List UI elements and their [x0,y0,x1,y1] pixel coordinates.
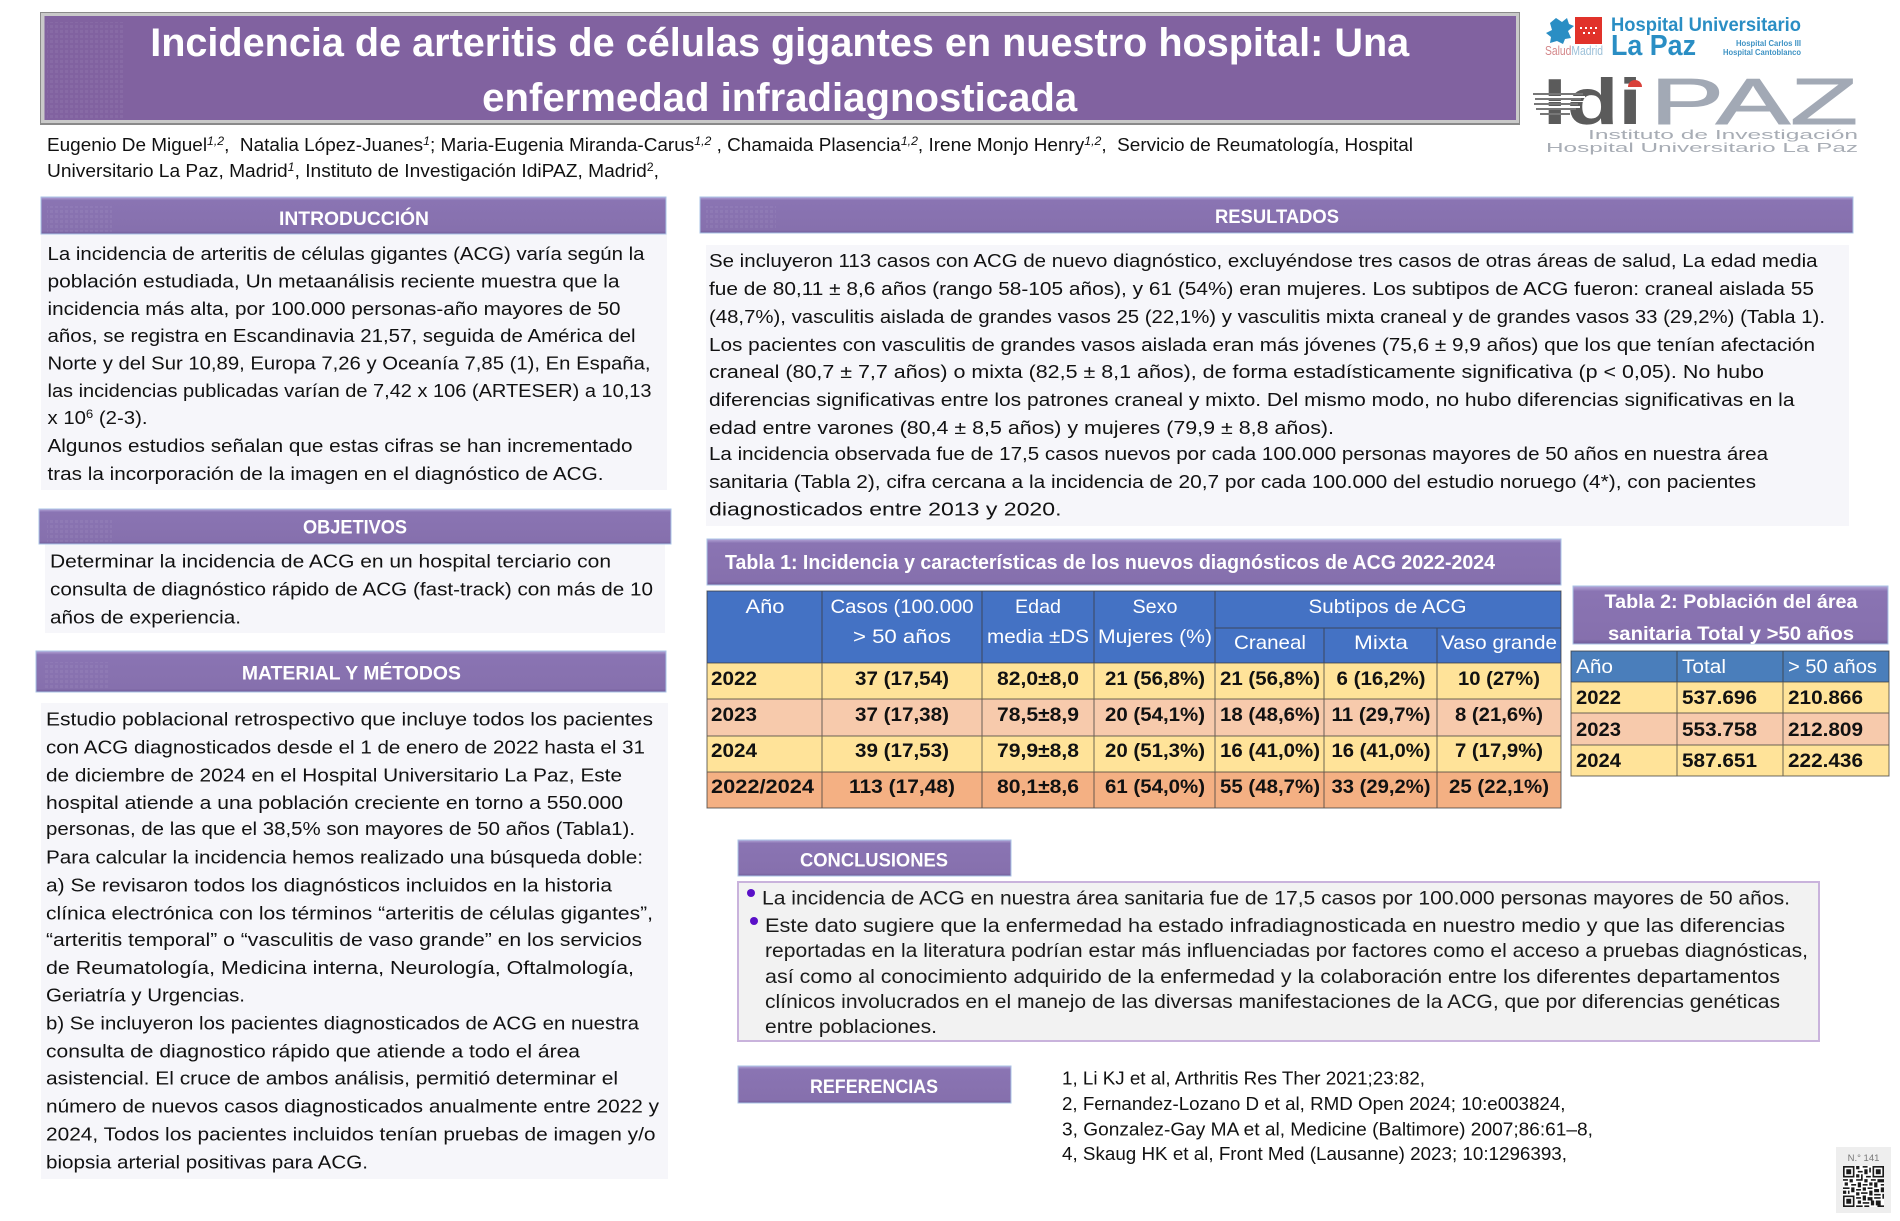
text block: material y métodos: Geriatría y Urgencias. [46,984,245,1006]
text block: introducción: Norte y del Sur 10,89, Europa 7,26 y Oceanía 7,85 (1), En España, [48,352,650,374]
text block: introducción: años, se registra en Escandinavia 21,57, seguida de América del [48,325,636,346]
table 1: 2022/2024 [711,776,814,798]
text block: introducción: población estudiada, Un metaanálisis reciente muestra que la [48,270,620,292]
table 1: 2024 [711,740,757,762]
heading: tabla 1 [707,539,1561,585]
text block: material y métodos [46,708,660,1172]
heading: resultados [700,197,1853,233]
logo: IdiPAZ [1533,65,1858,155]
text block: resultados: La incidencia observada fue de 17,5 casos nuevos por cada 100.000 personas mayores de 50 años en nuestra área [709,443,1769,464]
panel: resultados [700,197,1853,526]
authors and affiliations: Eugenio De Miguel [47,134,203,155]
table 2 [1571,651,1889,776]
logo: IdiPAZ: PAZ [1650,65,1858,138]
authors and affiliations [47,134,1413,181]
table 1: Mujeres (%) [1098,626,1212,648]
text block: introducción [48,243,652,484]
poster number and QR code [1836,1147,1891,1213]
logo: Hospital Universitario La Paz: La Paz [1611,30,1696,62]
conclusion 2: clínicos involucrados en el manejo de las diversas manifestaciones de la ACG, que por diferencias genéticas [765,991,1780,1013]
authors and affiliations: , Instituto de Investigación IdiPAZ, Madrid [295,160,647,181]
text block: material y métodos: biopsia arterial positivas para ACG. [46,1152,368,1172]
references list: 1, Li KJ et al, Arthritis Res Ther 2021;23:82, [1062,1068,1425,1088]
table 1: 18 (48,6%) [1220,704,1320,726]
conclusion 2 [765,915,1808,1038]
table 1: 2023 [711,704,757,726]
logo: Hospital Universitario La Paz: SaludMadrid [1545,44,1603,58]
conclusion 1: La incidencia de ACG en nuestra área sanitaria fue de 17,5 casos por 100.000 personas mayores de 50 años. [762,888,1790,910]
text block: material y métodos: 2024, Todos los pacientes incluidos tenían pruebas de imagen y/o [46,1124,656,1144]
text block: material y métodos: personas, de las que el 38,5% son mayores de 50 años (Tabla1). [46,818,635,839]
references list: 3, Gonzalez-Gay MA et al, Medicine (Baltimore) 2007;86:61–8, [1062,1118,1593,1140]
text block: objetivos: Determinar la incidencia de ACG en un hospital terciario con [50,550,611,572]
text block: objetivos [50,550,653,628]
text block: introducción: las incidencias publicadas varían de 7,42 x 106 (ARTESER) a 10,13 [48,380,652,401]
table 1: Año [746,596,785,618]
table 2: 553.758 [1682,720,1757,741]
bullet 2 [750,917,758,925]
table 1: 37 (17,38) [855,704,949,726]
text block: resultados: diagnosticados entre 2013 y 2020. [709,498,1062,520]
table 1: 37 (17,54) [855,668,949,690]
logo: Hospital Universitario La Paz: Hospital Universitario [1611,14,1801,36]
text block: material y métodos: consulta de diagnostico rápido que atiende a todo el área [46,1040,581,1062]
table 1: 20 (54,1%) [1105,704,1205,726]
text block: material y métodos: clínica electrónica con los términos “arteritis de células gigantes”, [46,902,653,924]
text block: resultados: fue de 80,11 ± 8,6 años (rango 58-105 años), y 61 (54%) eran mujeres. Los subtipos de ACG fueron: craneal aislada 55 [709,278,1814,299]
table 1: > 50 años [853,626,951,648]
table 1: 11 (29,7%) [1332,704,1430,726]
text block: material y métodos: a) Se revisaron todos los diagnósticos incluidos en la historia [46,874,613,896]
table 1: 21 (56,8%) [1105,668,1205,690]
text block: material y métodos: de diciembre de 2024 en el Hospital Universitario La Paz, Este [46,764,622,786]
text block: material y métodos: número de nuevos casos diagnosticados anualmente entre 2022 y [46,1096,660,1116]
text block: material y métodos: Estudio poblacional retrospectivo que incluye todos los pacientes [46,708,653,730]
heading: material y métodos [36,651,666,692]
table 1: 20 (51,3%) [1105,740,1205,762]
title banner: Incidencia de arteritis de células gigantes en nuestro hospital: Una [150,21,1410,65]
text block: material y métodos: de Reumatología, Medicina interna, Neurología, Oftalmología, [46,957,634,978]
authors and affiliations: 1 [423,134,430,148]
authors and affiliations: , Natalia López-Juanes [224,134,423,155]
table 1: 78,5±8,9 [997,704,1079,726]
text block: resultados: Los pacientes con vasculitis de grandes vasos aislada eran más jóvenes (75,6 ± 9,9 años) que los que tenían afectación [709,334,1815,355]
panel: introducción [41,197,667,490]
table 1: 8 (21,6%) [1455,704,1543,726]
table 1: Mixta [1354,632,1408,654]
heading: objetivos [39,509,671,544]
text block: resultados: edad entre varones (80,4 ± 8,5 años) y mujeres (79,9 ± 8,8 años). [709,417,1334,438]
authors and affiliations: ; Maria-Eugenia Miranda-Carus [430,134,694,155]
table 2: 210.866 [1788,688,1863,709]
table 1: 6 (16,2%) [1336,668,1426,690]
authors and affiliations: 1,2 [694,134,712,148]
table 1: Sexo [1132,596,1178,618]
table 2: 222.436 [1788,751,1863,772]
text block: introducción: x 10 [48,407,82,428]
panel: material y métodos [36,651,668,1179]
authors and affiliations: 2 [647,160,654,174]
heading: conclusiones: CONCLUSIONES [800,850,948,872]
table 2: 2022 [1576,688,1621,709]
table 1: 39 (17,53) [855,740,949,762]
table 2: 2023 [1576,720,1621,741]
table 2: > 50 años [1788,657,1877,678]
text block: material y métodos: b) Se incluyeron los pacientes diagnosticados de ACG en nuestra [46,1012,640,1034]
table 1: 21 (56,8%) [1220,668,1320,690]
text block: introducción: La incidencia de arteritis de células gigantes (ACG) varía según la [48,243,645,264]
logo: IdiPAZ: Hospital Universitario La Paz [1546,140,1858,155]
table 1: 79,9±8,8 [997,740,1079,762]
heading: referencias [738,1066,1011,1103]
bullet 1 [747,889,755,897]
conclusion 2: reportadas en la literatura podrían estar más influenciadas por factores como el acceso a pruebas diagnósticas, [765,940,1808,962]
table 1: 2022 [711,668,757,690]
logo: IdiPAZ: Idi [1543,65,1642,138]
table 2: 2024 [1576,751,1621,772]
authors and affiliations: Universitario La Paz, Madrid [47,160,279,181]
table 1: Casos (100.000 [830,596,974,618]
table 1: 25 (22,1%) [1449,776,1549,798]
authors and affiliations: , Irene Monjo Henry [918,134,1085,155]
table 2: 212.809 [1788,720,1863,741]
conclusion 2: así como al conocimiento adquirido de la enfermedad y la colaboración entre los diferentes departamentos [765,966,1780,988]
text block: resultados [709,250,1825,520]
table 1: 7 (17,9%) [1455,740,1543,762]
table 1: media ±DS [987,626,1089,648]
authors and affiliations: 1,2 [207,134,224,148]
authors and affiliations: , Servicio de Reumatología, Hospital [1101,134,1413,155]
table 1: Vaso grande [1441,632,1557,654]
table 1: Subtipos de ACG [1308,596,1466,618]
logo: IdiPAZ: Instituto de Investigación [1588,127,1858,142]
text block: objetivos: años de experiencia. [50,606,241,628]
text block: resultados: (48,7%), vasculitis aislada de grandes vasos 25 (22,1%) y vasculitis mixta craneal y de grandes vasos 33 (29,2%) (Tabla 1). [709,306,1825,327]
table 1: 82,0±8,0 [997,668,1079,690]
title banner: enfermedad infradiagnosticada [482,76,1078,120]
logo: Hospital Universitario La Paz: Hospital Cantoblanco [1723,48,1801,57]
conclusion 2: entre poblaciones. [765,1016,937,1038]
title banner [40,12,1520,125]
authors and affiliations: , Chamaida Plasencia [711,134,902,155]
table 2: Año [1576,657,1613,678]
text block: resultados: craneal (80,7 ± 7,7 años) o mixta (82,5 ± 8,1 años), de forma estadísticamente significativa (p < 0,05). No hubo [709,361,1764,382]
text block: introducción: tras la incorporación de la imagen en el diagnóstico de ACG. [48,463,604,484]
text block: material y métodos: Para calcular la incidencia hemos realizado una búsqueda doble: [46,846,643,868]
authors and affiliations: , [654,160,659,181]
heading: tabla 2: Tabla 2: Población del área [1604,592,1858,613]
table 2: 587.651 [1682,751,1757,772]
table 1: 55 (48,7%) [1220,776,1320,798]
table 1 [707,591,1561,808]
table 1: 113 (17,48) [849,776,955,798]
heading: referencias: REFERENCIAS [810,1077,938,1098]
poster number and QR code: N.° 141 [1848,1153,1879,1164]
text block: resultados: diferencias significativas entre los patrones craneal y mixto. Del mismo modo, no hubo diferencias significativas en la [709,389,1795,410]
references list [1062,1068,1593,1164]
heading: introducción: INTRODUCCIÓN [279,208,429,230]
conclusion 2: Este dato sugiere que la enfermedad ha estado infradiagnosticada en nuestro medio y que las diferencias [765,915,1785,937]
heading: tabla 2 [1573,586,1888,645]
heading: material y métodos: MATERIAL Y MÉTODOS [242,662,461,684]
table 2: Total [1682,657,1726,678]
authors and affiliations: 1,2 [901,134,918,148]
authors and affiliations: 1,2 [1084,134,1102,148]
text block: resultados: sanitaria (Tabla 2), cifra cercana a la incidencia de 20,7 por cada 100.000 del estudio noruego (4*), con pacientes [709,471,1756,492]
table 1: 16 (41,0%) [1332,740,1430,762]
text block: material y métodos: hospital atiende a una población creciente en torno a 550.000 [46,792,623,813]
text block: material y métodos: con ACG diagnosticados desde el 1 de enero de 2022 hasta el 31 [46,736,645,758]
heading: tabla 1: Tabla 1: Incidencia y características de los nuevos diagnósticos de ACG 2022-2024 [725,552,1496,574]
logo: Hospital Universitario La Paz [1545,14,1801,62]
text block: material y métodos: asistencial. El cruce de ambos análisis, permitió determinar el [46,1068,618,1088]
text block: introducción: (2-3). [93,407,148,428]
authors and affiliations: 1 [288,160,295,174]
references list: 4, Skaug HK et al, Front Med (Lausanne) 2023; 10:1296393, [1062,1143,1567,1164]
text block: objetivos: consulta de diagnóstico rápido de ACG (fast-track) con más de 10 [50,578,653,600]
text block: introducción: 6 [86,407,94,421]
heading: resultados: RESULTADOS [1215,207,1339,228]
text block: resultados: Se incluyeron 113 casos con ACG de nuevo diagnóstico, excluyéndose tres casos de otras áreas de salud, La edad media [709,250,1818,271]
text block: introducción: incidencia más alta, por 100.000 personas-año mayores de 50 [48,298,620,319]
references list: 2, Fernandez-Lozano D et al, RMD Open 2024; 10:e003824, [1062,1093,1566,1114]
table 1: 61 (54,0%) [1105,776,1205,798]
table 1: 10 (27%) [1458,668,1540,690]
panel: objetivos [39,509,671,633]
table 1: Craneal [1234,632,1306,654]
table 2: 537.696 [1682,688,1757,709]
table 1: Edad [1015,596,1061,618]
table 1: 33 (29,2%) [1332,776,1430,798]
heading: conclusiones [738,840,1011,876]
heading: introducción [41,197,666,234]
heading: tabla 2: sanitaria Total y >50 años [1608,624,1854,645]
text block: material y métodos: “arteritis temporal” o “vasculitis de vaso grande” en los servicios [46,929,642,950]
heading: objetivos: OBJETIVOS [303,518,407,538]
table 1: 80,1±8,6 [997,776,1079,798]
table 1: 16 (41,0%) [1220,740,1320,762]
text block: introducción: Algunos estudios señalan que estas cifras se han incrementado [48,435,632,456]
logo: Hospital Universitario La Paz: Hospital Carlos III [1736,39,1801,48]
panel: conclusiones [738,882,1819,1041]
